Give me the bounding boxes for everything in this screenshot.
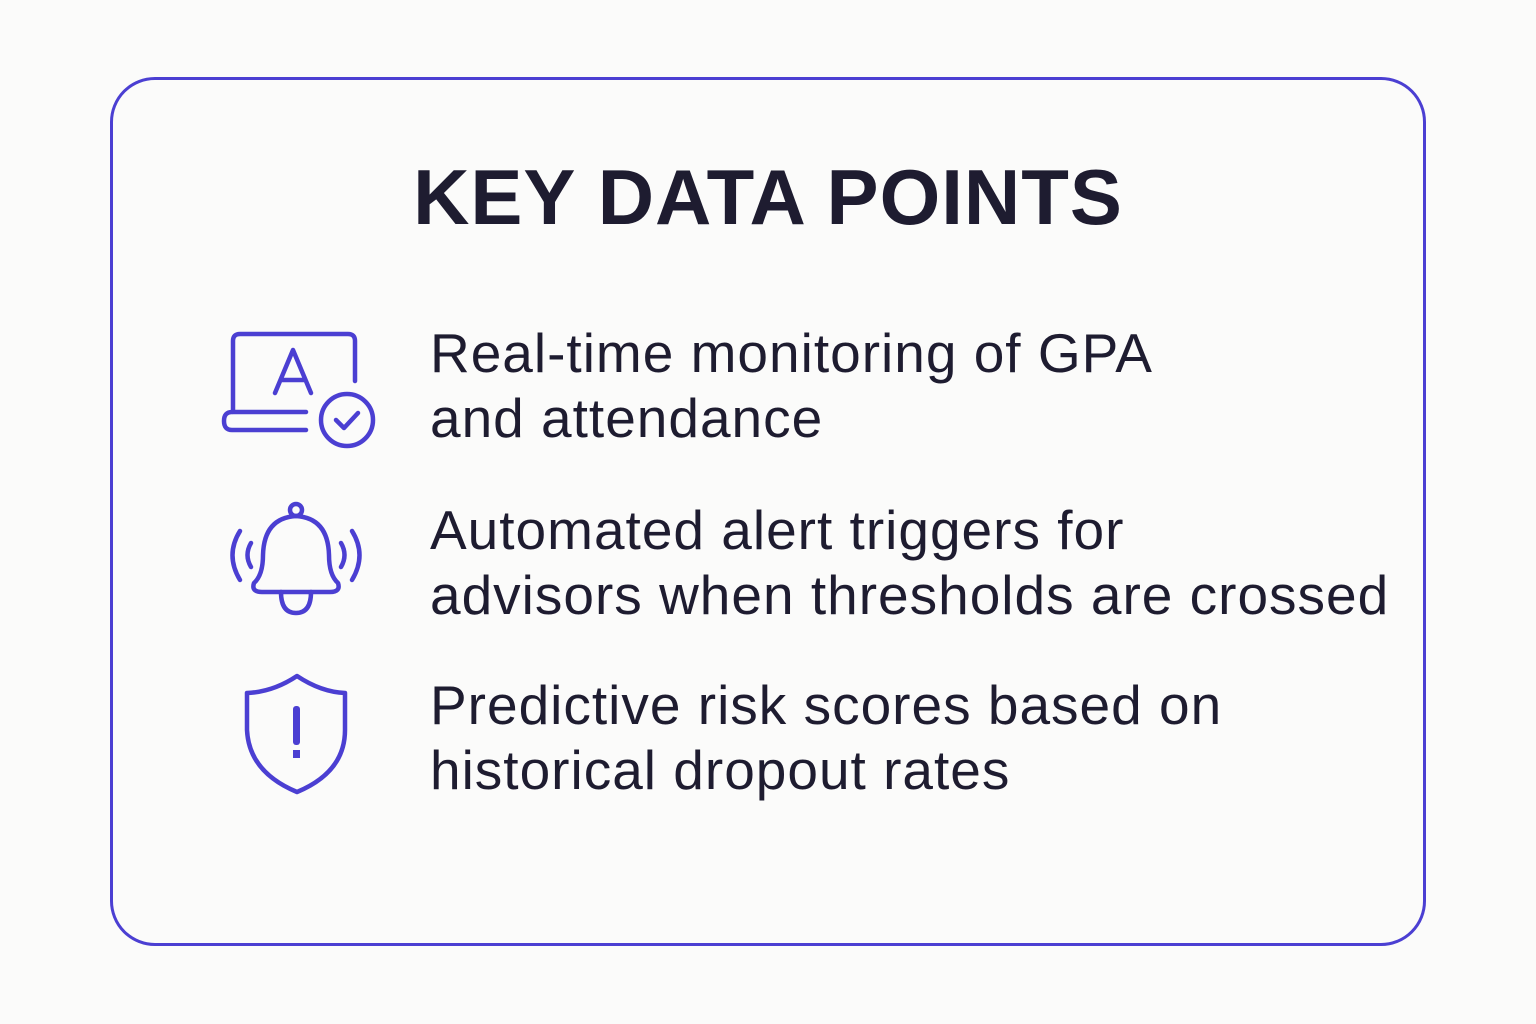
text: item 3: historical dropout rates [430, 739, 1010, 801]
text: item 1: and attendance [430, 387, 823, 449]
text: item 1: Real-time monitoring of GPA [430, 322, 1153, 384]
text: item 2 [430, 499, 1389, 626]
text: item 3: Predictive risk scores based on [430, 674, 1222, 736]
text: item 3 [430, 674, 1222, 801]
text: item 2: Automated alert triggers for [430, 499, 1124, 561]
panel border [110, 77, 1426, 946]
text: item 1 [430, 322, 1153, 449]
text: item 2: advisors when thresholds are crossed [430, 564, 1389, 626]
title: KEY DATA POINTS [413, 153, 1123, 241]
